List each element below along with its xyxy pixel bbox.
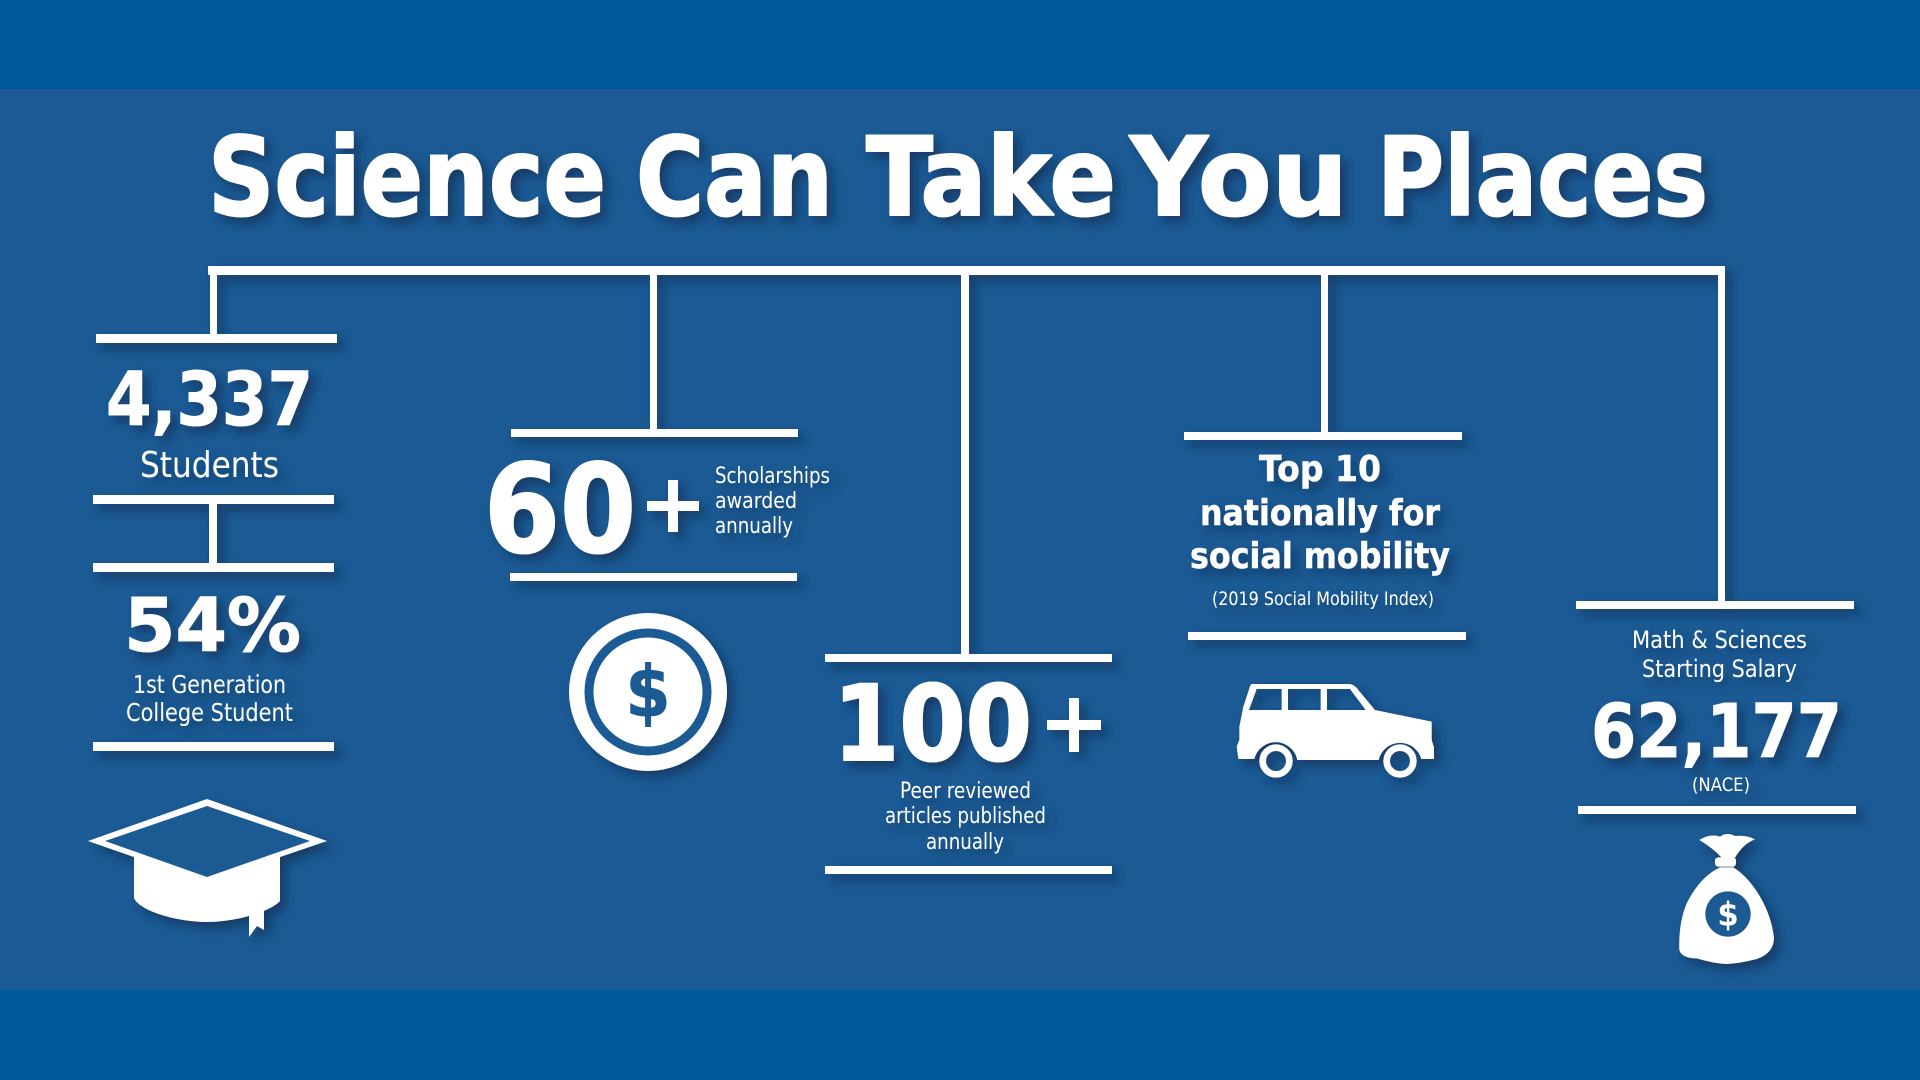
- panel: students: College Student: [126, 698, 293, 727]
- panel: peer reviewed articles: 100: [833, 663, 1032, 785]
- panel: starting salary: Math & Sciences: [1632, 626, 1807, 654]
- title: [208, 114, 1708, 241]
- panel: social mobility: social mobility: [1190, 536, 1450, 577]
- panel: starting salary: (NACE): [1692, 774, 1750, 796]
- panel: students: 54%: [124, 583, 301, 669]
- panel: social mobility: nationally for: [1200, 493, 1440, 534]
- icon: dollar coin: [569, 613, 727, 771]
- panel: social mobility: [1184, 432, 1466, 640]
- icon: car: [1237, 684, 1434, 774]
- panel: scholarships: 60: [484, 439, 636, 581]
- panel: scholarships: Scholarships: [715, 464, 830, 489]
- panel: starting salary: [1576, 601, 1856, 814]
- icon: graduation cap: [88, 799, 327, 937]
- panel: peer reviewed articles: annually: [926, 830, 1004, 855]
- panel: students: 4,337: [106, 357, 313, 443]
- panel: peer reviewed articles: [825, 654, 1112, 874]
- panel: scholarships: [484, 429, 830, 581]
- title: Take: [866, 114, 1116, 241]
- panel: starting salary: Starting Salary: [1642, 655, 1797, 683]
- panel: students: Students: [140, 445, 279, 486]
- panel: starting salary: 62,177: [1591, 689, 1842, 775]
- title: Places: [1377, 114, 1708, 241]
- connector tree: [208, 266, 1725, 656]
- title: Can: [636, 114, 833, 241]
- icon: money bag: [1679, 834, 1774, 964]
- panel: students: [93, 334, 337, 751]
- title: Science: [208, 114, 606, 241]
- panel: social mobility: Top 10: [1259, 449, 1381, 490]
- panel: social mobility: (2019 Social Mobility Index): [1212, 588, 1434, 610]
- panel: scholarships: awarded: [715, 489, 797, 514]
- title: You: [1128, 114, 1348, 241]
- panel: peer reviewed articles: Peer reviewed: [900, 779, 1031, 804]
- panel: peer reviewed articles: articles published: [885, 804, 1046, 829]
- icon: money bag: $: [1717, 894, 1739, 934]
- icon: dollar coin: $: [626, 651, 670, 733]
- panel: scholarships: annually: [715, 514, 793, 539]
- panel: students: 1st Generation: [133, 670, 286, 699]
